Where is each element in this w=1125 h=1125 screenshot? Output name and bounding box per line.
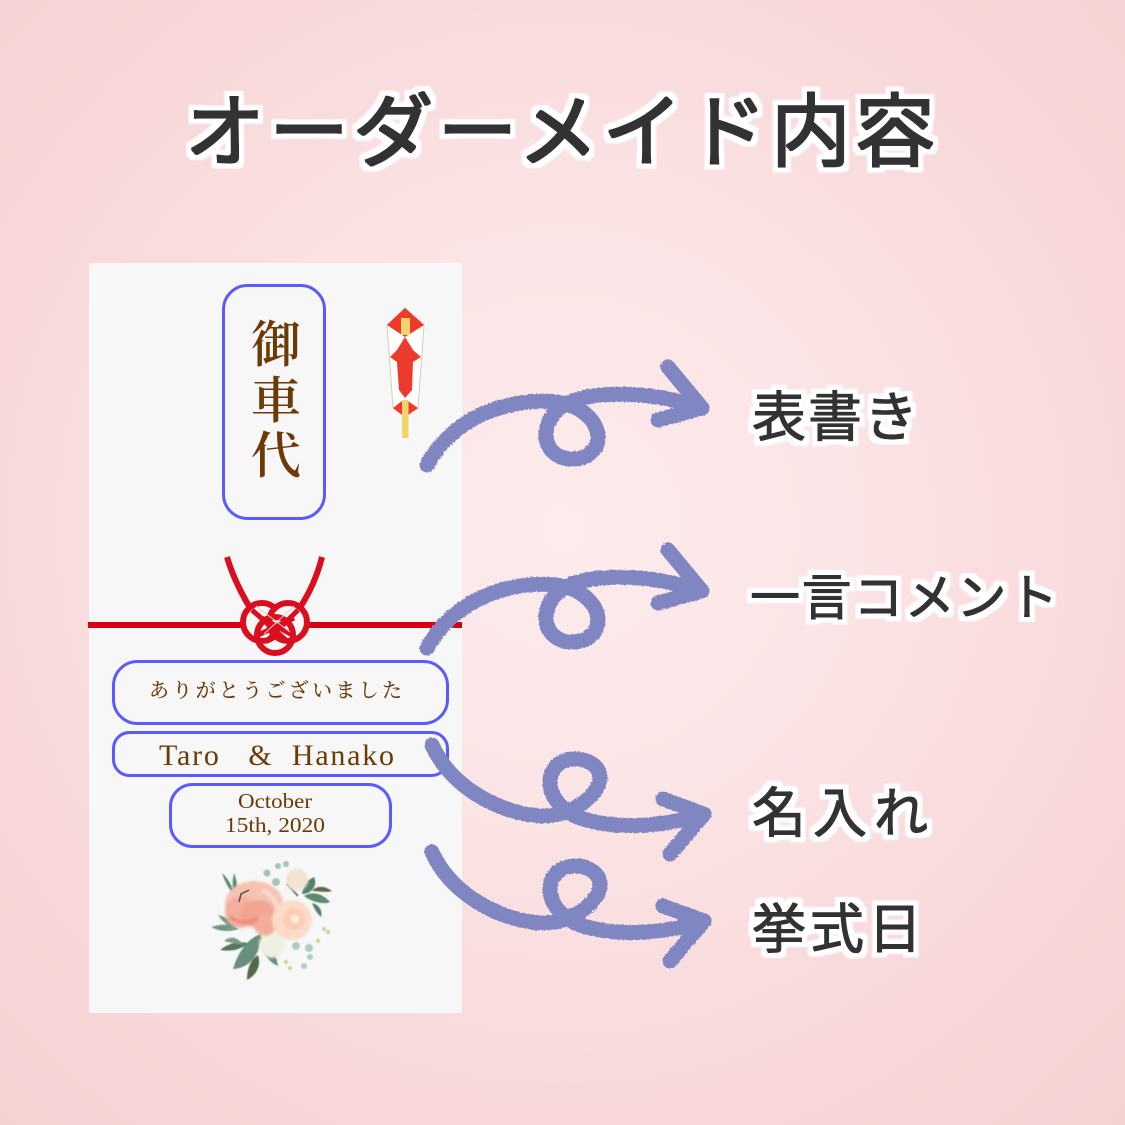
text box: message: ありがとうございました [149, 674, 402, 703]
label: 一言コメント: 一言コメント [750, 558, 1058, 630]
frame: heading text 御車代: 車 [251, 361, 301, 433]
text box: date [170, 784, 390, 846]
text box: date: October [238, 789, 312, 813]
panel: envelope card [88, 263, 462, 1013]
text box: names [114, 732, 448, 776]
frame: heading text 御車代: 御 [251, 305, 301, 377]
frame: heading text 御車代: 代 [251, 416, 301, 488]
icon: noshi ornament [387, 308, 424, 438]
text box: names: Taro & Hanako [159, 739, 394, 772]
arrow: to 表書き [427, 367, 702, 465]
icon: flower bouquet [211, 861, 332, 980]
title: オーダーメイド内容 [185, 68, 935, 184]
arrow: to 名入れ [432, 745, 704, 854]
text box: message [114, 662, 448, 724]
frame: heading text 御車代 [224, 286, 324, 518]
arrow: to 一言コメント [427, 550, 702, 648]
arrow: to 挙式日 [432, 852, 704, 961]
label: 表書き: 表書き [752, 373, 918, 452]
icon: mizuhiki red cord and knot [88, 557, 462, 653]
label: 名入れ: 名入れ [752, 769, 928, 848]
text box: date: 15th, 2020 [225, 813, 325, 837]
label: 挙式日: 挙式日 [752, 885, 922, 964]
